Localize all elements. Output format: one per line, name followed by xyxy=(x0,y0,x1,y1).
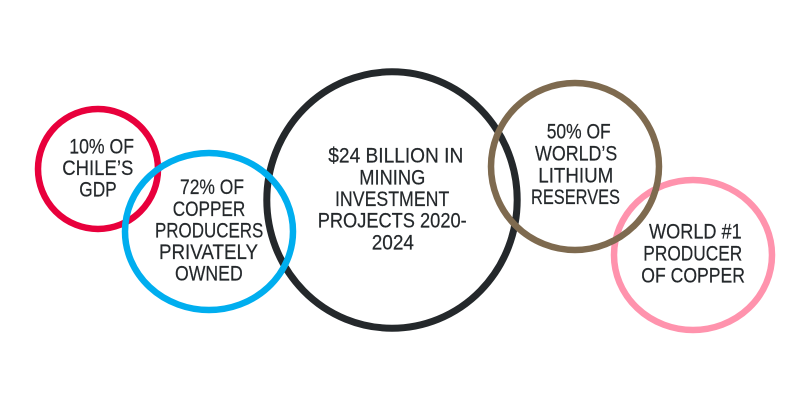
text: world #1 producer of copper: WORLD #1 xyxy=(649,221,742,244)
ring: black xyxy=(267,72,517,328)
text: world #1 producer of copper: OF COPPER xyxy=(641,264,745,287)
text: $24 billion in mining investment: 2024 xyxy=(372,232,414,255)
text: 72% of copper producers privately owned: PRIVATELY xyxy=(159,241,258,264)
text: $24 billion in mining investment: MINING xyxy=(359,166,425,189)
text: 72% of copper producers privately owned: PRODUCERS xyxy=(155,219,263,242)
text: 10% of Chile's GDP: CHILE’S xyxy=(62,157,133,180)
ring: blue xyxy=(125,153,293,310)
ring: red xyxy=(38,109,158,229)
panel: red circle, 10% of GDP xyxy=(38,109,158,229)
text: 72% of copper producers privately owned: 72% OF xyxy=(180,176,244,199)
text: $24 billion in mining investment: PROJECTS 2020- xyxy=(318,210,467,233)
text: 10% of Chile's GDP: GDP xyxy=(79,179,117,202)
text: 50% of world's lithium reserves: 50% OF xyxy=(547,121,611,144)
text: world #1 producer of copper: PRODUCER xyxy=(643,243,742,266)
text: 50% of world's lithium reserves xyxy=(531,121,620,209)
text: 50% of world's lithium reserves: RESERVES xyxy=(531,186,620,209)
text: 72% of copper producers privately owned: OWNED xyxy=(175,263,243,286)
text: $24 billion in mining investment: INVESTMENT xyxy=(335,188,449,211)
ring: pink xyxy=(614,180,772,330)
text: 50% of world's lithium reserves: WORLD’S xyxy=(535,143,617,166)
panel: brown circle, lithium reserves xyxy=(491,83,659,250)
text: 10% of Chile's GDP xyxy=(62,135,134,202)
text: world #1 producer of copper xyxy=(641,221,745,287)
ring: brown xyxy=(491,83,659,250)
panel: pink circle, world number one xyxy=(614,180,772,330)
text: 72% of copper producers privately owned xyxy=(155,176,263,286)
panel: blue circle, privately owned producers xyxy=(125,153,293,310)
text: $24 billion in mining investment: $24 BILLION IN xyxy=(328,144,463,167)
text: 72% of copper producers privately owned: COPPER xyxy=(173,198,245,221)
text: 10% of Chile's GDP: 10% OF xyxy=(69,135,134,158)
panel: black circle, investment xyxy=(267,72,517,328)
text: $24 billion in mining investment xyxy=(318,144,467,255)
text: 50% of world's lithium reserves: LITHIUM xyxy=(538,165,613,188)
